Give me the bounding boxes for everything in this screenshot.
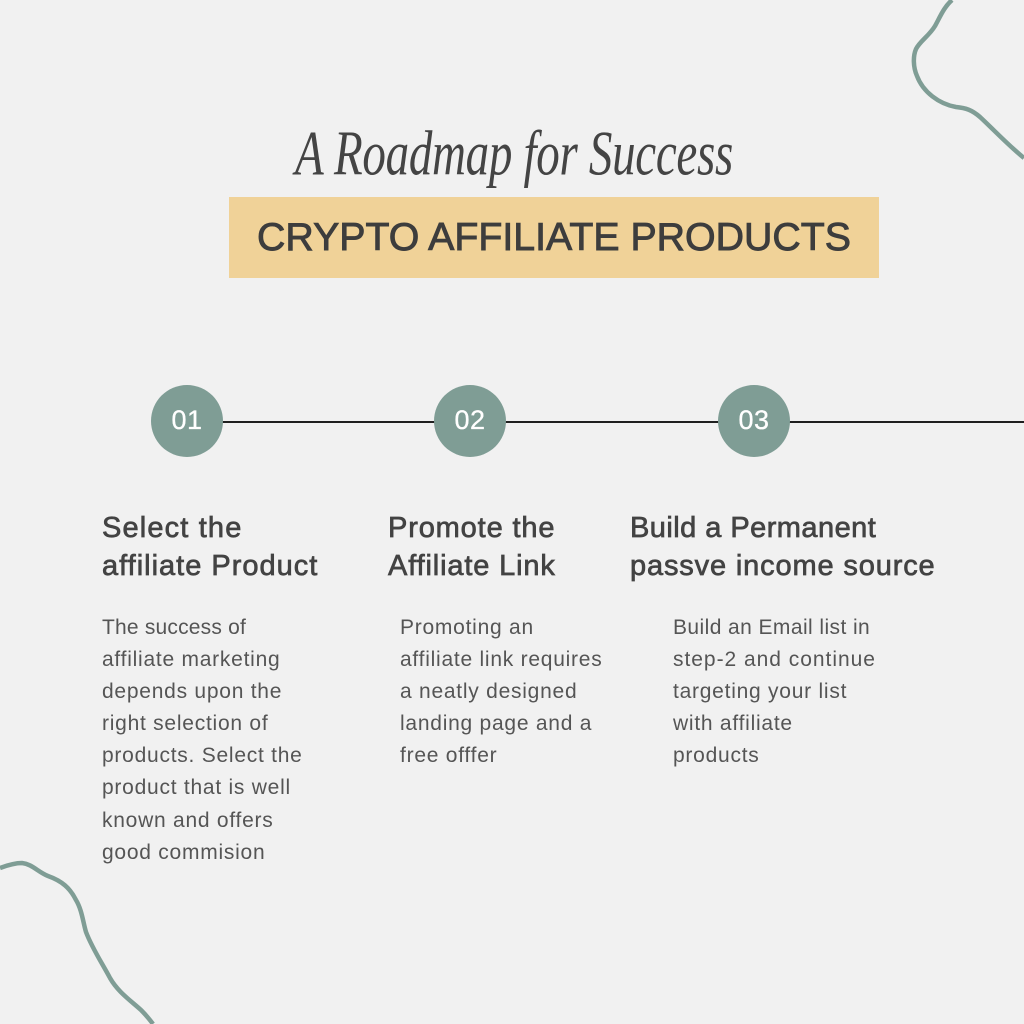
step 1 heading: affiliate Product (102, 550, 318, 582)
timeline line (187, 421, 1024, 423)
step 3 text: with affiliate (673, 712, 793, 735)
step 2 heading (388, 512, 556, 582)
step 2 text: a neatly designed (400, 680, 577, 703)
step 1 text: product that is well (102, 776, 291, 799)
step 1 text: depends upon the (102, 680, 282, 703)
step 1 text: products. Select the (102, 744, 303, 767)
step 1 text: right selection of (102, 712, 268, 735)
step 3 text (673, 616, 876, 767)
step 1 number (151, 385, 223, 457)
step 2 heading: Affiliate Link (388, 550, 556, 582)
step 2 heading: Promote the (388, 512, 555, 544)
step 2 text (400, 616, 602, 767)
title banner (229, 197, 879, 278)
step 3 text: targeting your list (673, 680, 847, 703)
step 1 text: good commision (102, 841, 265, 864)
step 3 text: step-2 and continue (673, 648, 876, 671)
step 2 text: free offfer (400, 744, 497, 767)
step 1 heading (102, 512, 318, 582)
step 3 heading (630, 512, 936, 582)
decorative curve: bottom left (0, 860, 155, 1024)
step 1 text: The success of (102, 616, 246, 639)
step 2 text: Promoting an (400, 616, 534, 639)
script title: A Roadmap for Success (295, 119, 733, 189)
step 3 heading: passve income source (630, 550, 936, 582)
step 2 text: affiliate link requires (400, 648, 602, 671)
decorative curve: top right (912, 0, 1024, 160)
step 1 heading: Select the (102, 512, 242, 544)
step 3 text: Build an Email list in (673, 616, 870, 639)
step 1 text: affiliate marketing (102, 648, 280, 671)
step 3 number (718, 385, 790, 457)
step 1 text (102, 616, 303, 864)
step 2 number (434, 385, 506, 457)
step 3 heading: Build a Permanent (630, 512, 876, 544)
step 1 number: 01 (171, 405, 203, 435)
step 2 text: landing page and a (400, 712, 592, 735)
step 3 number: 03 (738, 405, 770, 435)
step 3 text: products (673, 744, 760, 767)
step 1 text: known and offers (102, 809, 274, 832)
banner heading: CRYPTO AFFILIATE PRODUCTS (257, 215, 851, 259)
step 2 number: 02 (454, 405, 486, 435)
